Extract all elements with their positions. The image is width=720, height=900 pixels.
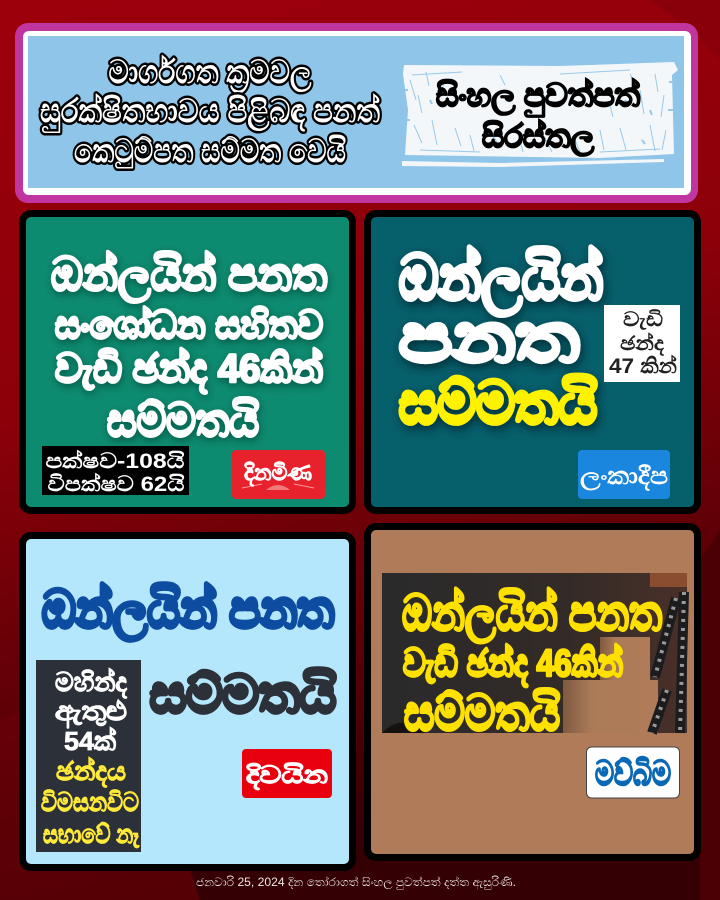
stamp label — [402, 62, 678, 167]
headline: සම්මතයි — [399, 371, 597, 436]
headline image: වැඩි ඡන්ද 46කින් — [403, 642, 623, 687]
headline: පනත — [399, 300, 579, 376]
title: කෙටුම්පත සම්මත වෙයි — [74, 132, 346, 169]
side note: 54ක් — [64, 726, 116, 756]
votes box: වැඩි — [623, 309, 663, 331]
vote count box — [42, 446, 189, 496]
logo: Dinamina — [232, 450, 325, 499]
header panel — [15, 23, 698, 203]
panel: Divaina — [19, 532, 356, 871]
headline — [399, 244, 603, 436]
votes box: ඡන්ද — [620, 331, 664, 356]
votes box: 47 කින් — [609, 354, 677, 378]
title: මාර්ගගත ක්‍රමවල — [108, 53, 312, 94]
panel: Dinamina — [19, 210, 356, 514]
headline: ඔන්ලයින් පනත — [42, 581, 334, 641]
side note: ඡන්දය — [56, 756, 126, 788]
headline: ඔන්ලයින් — [399, 244, 603, 316]
side note: මහින්ද — [55, 667, 127, 699]
votes box — [604, 305, 680, 382]
headline: සම්මතයි — [150, 666, 336, 724]
vote count box: පක්ෂව-108යි — [46, 449, 184, 473]
stamp label: සිංහල පුවත්පත් — [436, 77, 640, 117]
panel: Lankadeepa — [364, 210, 701, 514]
headline: වැඩි ඡන්ද 46කින් — [55, 347, 323, 394]
headline — [51, 248, 327, 446]
headline: ඔන්ලයින් පනත — [51, 248, 327, 303]
logo: Mawbima: මව්බිම — [595, 755, 671, 793]
headline: සංශෝධන සහිතව — [55, 304, 323, 347]
footer source: ජනවාරි 25, 2024 දින තෝරාගත් සිංහල පුවත්පත් දත්ත ඇසුරිණි. — [196, 875, 516, 890]
logo: Dinamina: දිනමිණ — [244, 460, 312, 487]
logo: Divaina — [242, 749, 332, 798]
side note: ඇතුළු — [55, 696, 127, 729]
headline image: ඔන්ලයින් පනත — [402, 585, 662, 644]
panel: Mawbima — [364, 523, 701, 861]
vote count box: විපක්ෂව 62යි — [48, 472, 184, 496]
logo: Mawbima — [586, 747, 680, 798]
title — [40, 53, 380, 169]
side note — [36, 660, 141, 852]
logo: Lankadeepa: ලංකාදීප — [580, 463, 668, 492]
title: සුරක්ෂිතභාවය පිළිබඳ පනත් — [40, 92, 380, 133]
side note: විමසනවිට — [41, 787, 139, 817]
headline image — [382, 573, 687, 741]
headline image: සම්මතයි — [404, 685, 560, 741]
headline: සම්මතයි — [107, 394, 259, 446]
headline — [42, 581, 336, 724]
stamp label: සිරස්තල — [482, 118, 595, 156]
logo: Lankadeepa — [578, 450, 670, 499]
side note: සභාවේ නෑ — [43, 819, 140, 849]
logo: Divaina: දිවයින — [246, 762, 328, 791]
